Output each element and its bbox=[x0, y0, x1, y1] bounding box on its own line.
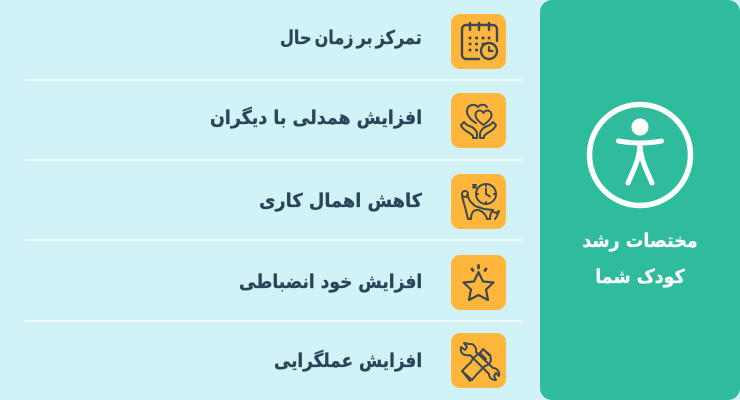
icon: hearts over hands bbox=[451, 93, 506, 148]
icon: shining star bbox=[451, 255, 506, 310]
panel: child development traits bbox=[540, 0, 740, 400]
icon: calendar with clock bbox=[451, 14, 506, 69]
heading: panel title: مختصات رشد bbox=[582, 230, 698, 252]
icon: person relaxing with clock bbox=[451, 174, 506, 229]
heading: increased pragmatism: افزایش عملگرایی bbox=[274, 350, 422, 372]
heading: panel title bbox=[582, 230, 698, 288]
heading: increased empathy: افزایش همدلی با دیگران bbox=[210, 107, 422, 129]
heading: present focus: تمرکز بر زمان حال bbox=[280, 27, 422, 49]
heading: panel title: کودک شما bbox=[595, 266, 685, 288]
heading: reduced procrastination: کاهش اهمال کاری bbox=[259, 190, 422, 212]
icon: hand holding wrench bbox=[451, 333, 506, 388]
heading: increased self-discipline: افزایش خود انضباطی bbox=[239, 271, 422, 293]
icon: human figure in circle bbox=[586, 102, 694, 208]
